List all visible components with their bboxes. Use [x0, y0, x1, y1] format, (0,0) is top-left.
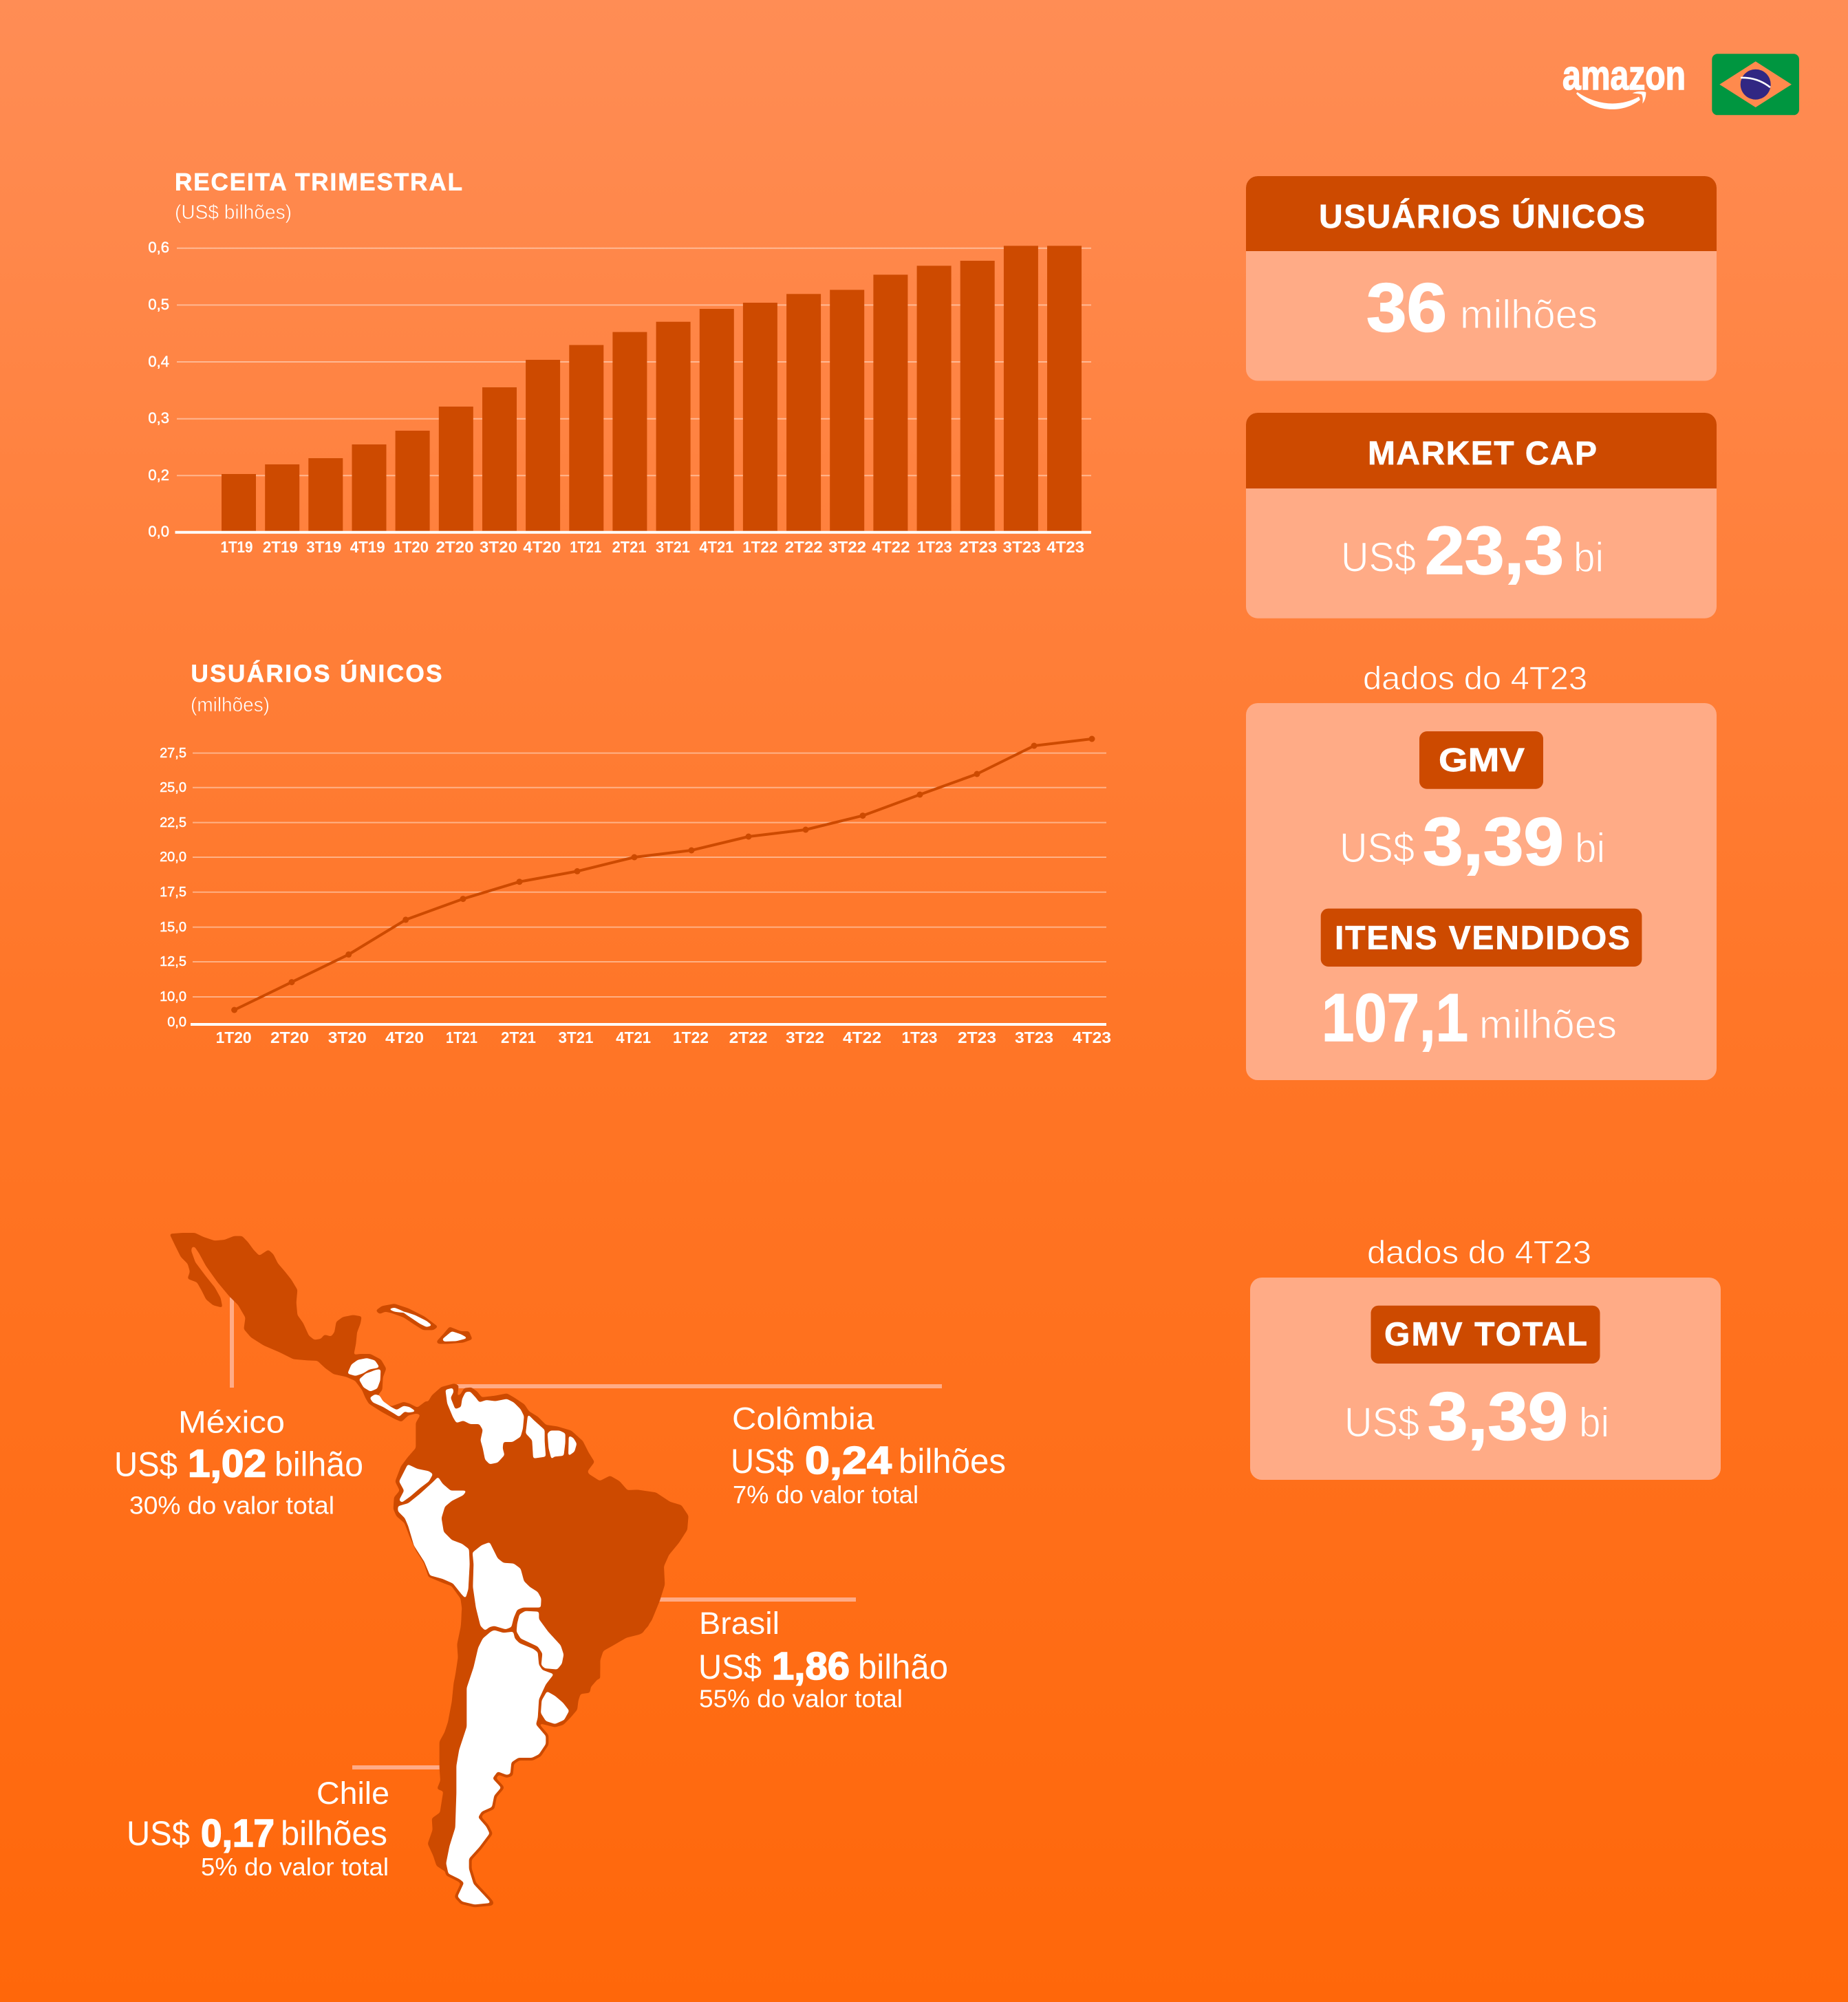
callout: México: bilhão [275, 1445, 363, 1484]
callout: México [114, 1405, 363, 1520]
callout: Chile: 5% do valor total [201, 1853, 389, 1881]
x axis labels: 4T20 [523, 538, 561, 556]
callout: Colômbia: Colômbia [732, 1401, 875, 1436]
x axis labels: 2T19 [263, 538, 298, 556]
callout: Brasil: US$ [698, 1648, 762, 1686]
logo: amazon [1562, 52, 1686, 109]
callout: Chile: bilhões [281, 1814, 387, 1853]
x axis labels: 3T20 [480, 538, 517, 556]
y axis labels [148, 239, 169, 540]
unit: milhões: (milhões) [191, 694, 270, 716]
callout: Brasil [698, 1606, 948, 1713]
callout: Chile: US$ [127, 1814, 190, 1853]
y axis labels: 27,5 [160, 746, 186, 761]
x axis labels: 1T23 [917, 538, 952, 556]
x axis labels: 4T21 [616, 1029, 651, 1046]
x axis labels: 1T21 [570, 538, 601, 556]
callout: México: US$ [114, 1445, 178, 1484]
x axis labels: 2T23 [959, 538, 997, 556]
icon: Brazil flag [1712, 54, 1799, 115]
value: US$ 3,39 bi: US$ [1344, 1399, 1419, 1445]
callout: Colômbia: US$ [731, 1442, 794, 1481]
value: US$ 3,39 bi: bi [1575, 825, 1605, 871]
badge: GMV total [1371, 1306, 1600, 1364]
callout: Brasil: Brasil [699, 1606, 780, 1641]
value: US$ 23,3 bi: bi [1573, 535, 1604, 581]
y axis labels: 25,0 [160, 780, 186, 795]
value: US$ 23,3 bi: US$ [1341, 535, 1416, 581]
x axis labels: 4T22 [843, 1029, 881, 1046]
logo: amazon: amazon [1562, 52, 1686, 98]
badge: GMV total: GMV TOTAL [1384, 1317, 1587, 1353]
leader lines [230, 1298, 942, 1769]
y axis labels: 20,0 [160, 850, 186, 865]
x axis labels: 2T20 [270, 1029, 309, 1046]
value: US$ 3,39 bi: US$ [1340, 825, 1415, 871]
x axis labels: 1T19 [220, 538, 253, 556]
x axis labels: 3T23 [1003, 538, 1041, 556]
x axis labels: 1T20 [216, 1029, 252, 1046]
badge: GMV [1419, 731, 1543, 789]
x axis labels: 2T23 [958, 1029, 996, 1046]
value: 107,1 milhões [1322, 980, 1617, 1055]
heading: usuários únicos: USUÁRIOS ÚNICOS [191, 660, 442, 687]
panel: market cap [1246, 413, 1717, 618]
x axis labels: 4T19 [350, 538, 385, 556]
x axis labels: 3T22 [786, 1029, 824, 1046]
panel: GMV total [1250, 1278, 1721, 1480]
data points [231, 736, 1095, 1013]
x axis labels: 4T21 [699, 538, 734, 556]
x axis labels: 4T23 [1046, 538, 1084, 556]
y axis labels: 10,0 [160, 989, 186, 1004]
bars [222, 246, 1082, 531]
y axis labels: 0,0 [148, 523, 169, 540]
y axis labels: 0,6 [148, 239, 169, 256]
x axis labels: 3T20 [328, 1029, 367, 1046]
value: US$ 23,3 bi [1341, 513, 1604, 588]
callout: Colômbia: 7% do valor total [733, 1481, 918, 1509]
callout: México: 30% do valor total [129, 1492, 334, 1520]
value: US$ 3,39 bi [1340, 804, 1605, 879]
panel: usuários únicos [1246, 176, 1717, 381]
callout: México: 1,02 [188, 1442, 266, 1486]
value: 107,1 milhões: milhões [1479, 1002, 1617, 1047]
bar chart: receita trimestral [148, 169, 1091, 556]
x axis labels: 3T23 [1015, 1029, 1053, 1046]
y axis labels [160, 746, 186, 1030]
callout: México: México [178, 1405, 285, 1440]
x axis labels: 4T23 [1073, 1029, 1111, 1046]
data line [235, 739, 1092, 1010]
y axis labels: 17,5 [160, 885, 186, 900]
x axis labels: 3T21 [559, 1029, 594, 1046]
panel: GMV e itens vendidos [1246, 703, 1717, 1080]
callout: Brasil: 55% do valor total [699, 1684, 903, 1713]
panel title: MARKET CAP [1368, 435, 1597, 472]
x axis labels: 2T22 [729, 1029, 768, 1046]
x axis labels [220, 538, 1084, 556]
callout: Chile: Chile [316, 1776, 389, 1811]
y axis labels: 0,5 [148, 296, 169, 313]
x axis labels: 4T20 [385, 1029, 424, 1046]
value: US$ 3,39 bi: 3,39 [1428, 1379, 1568, 1454]
y axis labels: 0,4 [148, 353, 169, 370]
map: Latin America [170, 1234, 942, 1904]
callout: Colômbia [731, 1401, 1006, 1509]
x axis labels: 4T22 [872, 538, 910, 556]
y axis labels: 12,5 [160, 954, 186, 969]
callout: Colômbia: bilhões [899, 1442, 1006, 1481]
heading: receita trimestral: RECEITA TRIMESTRAL [175, 169, 462, 195]
y axis labels: 15,0 [160, 920, 186, 935]
callout: Brasil: bilhão [858, 1648, 948, 1686]
y axis labels: 0,3 [148, 409, 169, 427]
x axis labels: 3T21 [656, 538, 690, 556]
panel title: USUÁRIOS ÚNICOS [1319, 197, 1645, 235]
value: US$ 23,3 bi: 23,3 [1425, 513, 1564, 588]
y axis labels: 0,0 [167, 1015, 186, 1030]
dark land: Mexico, Central America, South America [170, 1234, 688, 1904]
unit: US$ bilhões: (US$ bilhões) [175, 202, 292, 224]
x axis labels: 1T22 [742, 538, 777, 556]
badge: itens vendidos [1321, 909, 1642, 967]
callout: Brasil: 1,86 [772, 1644, 850, 1688]
x axis labels: 1T20 [394, 538, 429, 556]
x axis labels: 2T21 [501, 1029, 536, 1046]
y axis labels: 0,2 [148, 466, 169, 484]
white countries [347, 1308, 577, 1904]
value: 107,1 milhões: 107,1 [1322, 980, 1468, 1055]
badge: itens vendidos: ITENS VENDIDOS [1335, 920, 1630, 956]
callout: Chile: 0,17 [201, 1811, 275, 1855]
x axis labels: 1T21 [446, 1029, 477, 1046]
x axis labels: 3T19 [306, 538, 341, 556]
value: US$ 3,39 bi: bi [1579, 1399, 1609, 1445]
callout: Colômbia: 0,24 [805, 1439, 892, 1483]
value: US$ 3,39 bi [1344, 1379, 1609, 1454]
value: 36 milhões: 36 [1366, 270, 1447, 347]
value: US$ 3,39 bi: 3,39 [1423, 804, 1564, 879]
caption: dados do 4T23: dados do 4T23 [1363, 660, 1587, 696]
value: 36 milhões [1366, 270, 1598, 347]
x axis labels: 2T20 [436, 538, 473, 556]
x axis labels: 2T22 [785, 538, 823, 556]
x axis labels: 1T23 [901, 1029, 937, 1046]
line chart: usuários únicos [160, 660, 1111, 1046]
value: 36 milhões: milhões [1460, 292, 1598, 337]
x axis labels [216, 1029, 1111, 1046]
x axis labels: 2T21 [612, 538, 647, 556]
badge: GMV: GMV [1439, 742, 1525, 779]
x axis labels: 1T22 [673, 1029, 709, 1046]
caption: dados do 4T23 (GMV total): dados do 4T23 [1367, 1234, 1591, 1271]
x axis labels: 3T22 [828, 538, 866, 556]
callout: Chile [127, 1776, 389, 1881]
y axis labels: 22,5 [160, 815, 186, 830]
